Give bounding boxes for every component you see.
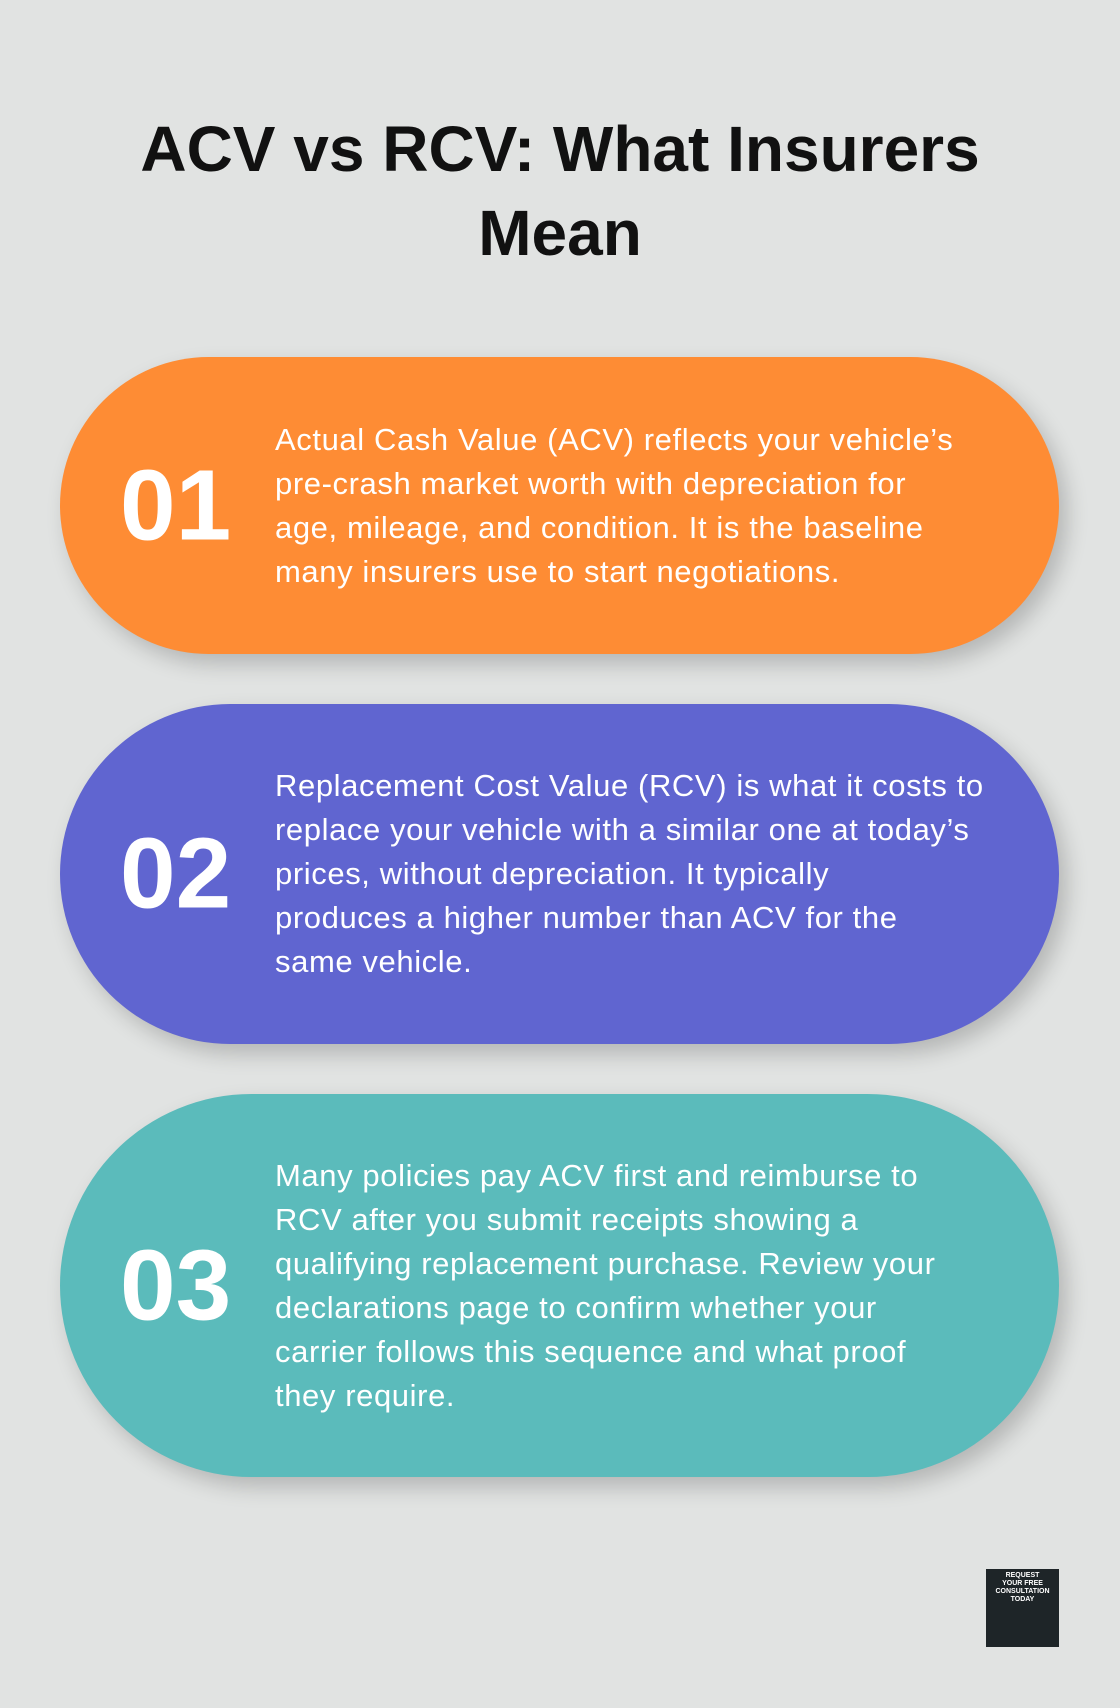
text: ACV: age, mileage, and condition. It is the baseline: [275, 510, 924, 544]
panel: card 03 sequence: [60, 1094, 1059, 1477]
text: RCV: replace your vehicle with a similar one at today’s: [275, 812, 970, 847]
panel: card 01 ACV: [60, 357, 1059, 654]
title: ACV vs RCV: What Insurers: [140, 113, 980, 185]
text: ACV: pre-crash market worth with depreciation for: [275, 466, 906, 500]
text: RCV: prices, without depreciation. It typically: [275, 856, 829, 891]
logo: consultation badge: TODAY: [1011, 1596, 1034, 1603]
title: [140, 113, 980, 269]
text: sequence: qualifying replacement purchase. Review your: [275, 1246, 936, 1280]
text: ACV: many insurers use to start negotiations.: [275, 554, 840, 588]
text: RCV: produces a higher number than ACV for the: [275, 900, 898, 935]
text: RCV: Replacement Cost Value (RCV) is what it costs to: [275, 768, 984, 803]
logo: consultation badge: CONSULTATION: [995, 1588, 1050, 1595]
text: sequence: they require.: [275, 1378, 455, 1412]
number 01: 01: [120, 449, 231, 561]
text: ACV: Actual Cash Value (ACV) reflects your vehicle’s: [275, 422, 953, 456]
number 02: 02: [120, 818, 231, 930]
text: ACV: [275, 422, 953, 588]
text: sequence: RCV after you submit receipts showing a: [275, 1202, 858, 1236]
number 03: 03: [120, 1229, 231, 1341]
text: sequence: Many policies pay ACV first and reimburse to: [275, 1158, 918, 1192]
title: Mean: [478, 197, 642, 269]
logo: consultation badge: YOUR FREE: [1002, 1580, 1043, 1587]
text: RCV: [275, 768, 984, 979]
text: sequence: declarations page to confirm whether your: [275, 1290, 877, 1324]
text: RCV: same vehicle.: [275, 944, 472, 979]
text: sequence: [275, 1158, 936, 1412]
logo: consultation badge: REQUEST: [1006, 1572, 1039, 1579]
panel: card 02 RCV: [60, 704, 1059, 1044]
text: sequence: carrier follows this sequence and what proof: [275, 1334, 906, 1368]
logo: consultation badge: [986, 1569, 1059, 1647]
